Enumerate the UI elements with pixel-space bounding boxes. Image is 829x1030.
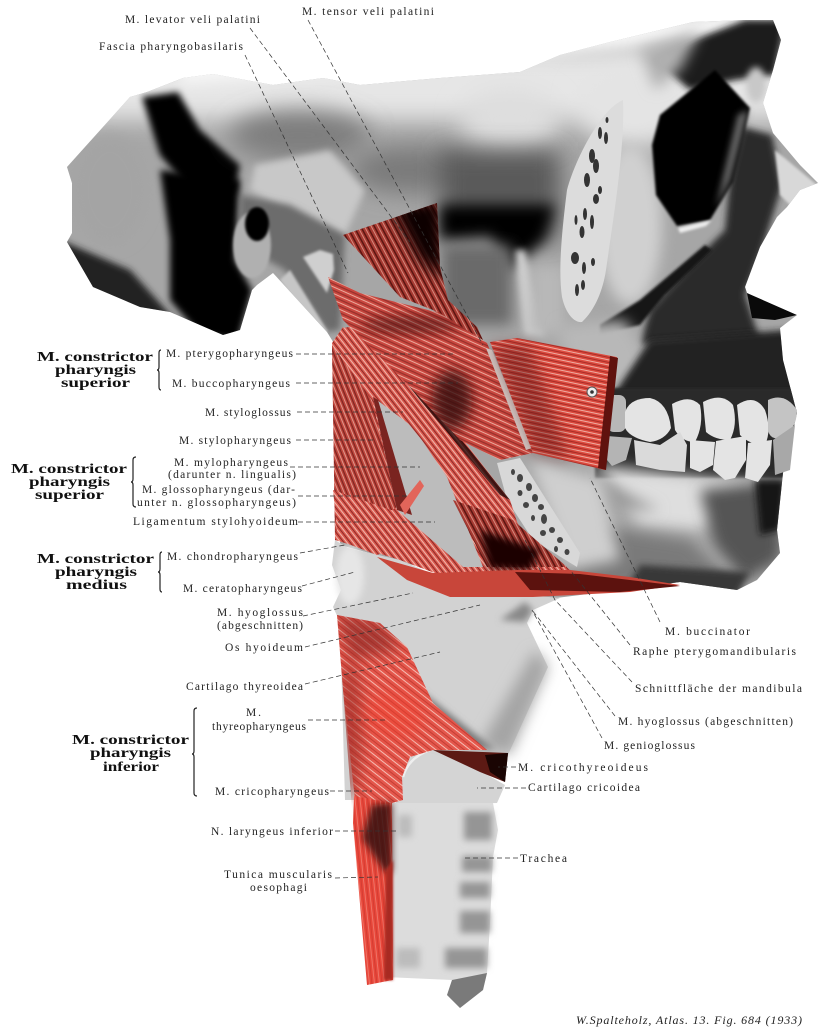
heading: M. constrictor pharyngis superior, second: pharyngis — [29, 475, 111, 490]
labels: upper group: M. buccopharyngeus — [172, 378, 291, 390]
lower teeth — [607, 425, 795, 482]
labels: lower group: M. ceratopharyngeus — [183, 583, 303, 595]
heading: M. constrictor pharyngis inferior: inferior — [103, 760, 159, 775]
labels: middle group: (darunter n. lingualis) — [168, 469, 296, 481]
M. buccinator — [490, 338, 618, 470]
heading: M. constrictor pharyngis superior, first — [37, 350, 153, 391]
top labels — [99, 6, 434, 53]
heading: M. constrictor pharyngis superior, second: superior — [35, 488, 104, 503]
labels: right side: M. genioglossus — [604, 740, 696, 752]
labels: right side: Raphe pterygomandibularis — [633, 646, 797, 658]
heading: M. constrictor pharyngis superior, first: pharyngis — [55, 363, 137, 378]
labels: right side: Cartilago cricoidea — [528, 782, 640, 794]
bracket 4 — [192, 708, 197, 796]
labels: inferior group: M. — [246, 707, 261, 719]
labels: right side: M. hyoglossus (abgeschnitten) — [618, 716, 793, 728]
pharyngeal muscle: pterygo and bucco — [328, 277, 533, 460]
heading: M. constrictor pharyngis medius: medius — [66, 578, 128, 593]
cricoid cartilage — [395, 750, 505, 806]
labels: right side: Schnittfläche der mandibula — [635, 683, 802, 695]
upper teeth — [607, 395, 797, 445]
labels: upper group: M. pterygopharyngeus — [166, 348, 294, 360]
labels: inferior group: N. laryngeus inferior — [211, 826, 333, 838]
muscle: deep lower bundle — [453, 500, 567, 570]
heading: M. constrictor pharyngis medius: M. constrictor — [37, 552, 154, 567]
labels: lower group — [167, 551, 304, 693]
pharyngeal muscle: levator — [343, 200, 483, 340]
heading: M. constrictor pharyngis medius — [37, 552, 154, 593]
labels: inferior group: oesophagi — [250, 882, 307, 894]
muscle: left constrictor group — [332, 327, 570, 590]
bracket 1 — [157, 350, 161, 390]
trachea — [385, 803, 498, 1008]
bracket 2 — [131, 457, 136, 507]
labels: lower group: (abgeschnitten) — [217, 620, 303, 632]
labels: right side: M. buccinator — [665, 626, 750, 638]
cut bone: mandibula — [497, 458, 580, 567]
labels: upper group: M. styloglossus — [205, 407, 292, 419]
gap with ligament — [373, 397, 483, 567]
cut bone: maxilla — [560, 100, 623, 322]
labels: middle group: Ligamentum stylohyoideum — [133, 516, 298, 528]
top labels: Fascia pharyngobasilaris — [99, 41, 244, 53]
muscle: stylopharyngeus bundle — [343, 325, 518, 525]
labels: middle group — [133, 457, 298, 528]
heading: M. constrictor pharyngis inferior: M. constrictor — [72, 733, 189, 748]
labels: right side — [518, 626, 802, 865]
oesophagus muscle — [353, 796, 393, 985]
labels: middle group: M. mylopharyngeus — [174, 457, 289, 469]
labels: upper group — [166, 348, 294, 447]
M. cricothyreoideus — [433, 750, 508, 782]
labels: lower group: M. hyoglossus — [217, 607, 304, 619]
top labels: M. levator veli palatini — [125, 14, 260, 26]
labels: right side: M. cricothyreoideus — [518, 762, 649, 774]
leader lines — [245, 20, 660, 878]
labels: inferior group — [211, 707, 333, 894]
heading: M. constrictor pharyngis medius: pharyngis — [55, 565, 138, 580]
raphe pterygomandibularis — [486, 348, 532, 450]
hyoid and larynx cartilage — [332, 540, 560, 800]
labels: lower group: Os hyoideum — [225, 642, 303, 654]
labels: inferior group: thyreopharyngeus — [212, 721, 307, 733]
heading: M. constrictor pharyngis superior, first: superior — [61, 376, 130, 391]
labels: right side: Trachea — [520, 853, 567, 865]
heading: M. constrictor pharyngis inferior: pharyngis — [90, 746, 172, 761]
labels: inferior group: M. cricopharyngeus — [215, 786, 330, 798]
credit: W.Spalteholz, Atlas. 13. Fig. 684 (1933) — [576, 1013, 802, 1027]
heading: M. constrictor pharyngis superior, second: M. constrictor — [11, 462, 127, 477]
M. thyreopharyngeus and M. cricopharyngeus — [337, 612, 487, 803]
labels: lower group: Cartilago thyreoidea — [186, 681, 303, 693]
skull and mandible — [60, 5, 829, 600]
top labels: M. tensor veli palatini — [302, 6, 434, 18]
labels: middle group: unter n. glossopharyngeus) — [137, 497, 296, 509]
mandibular muscle band — [377, 557, 680, 597]
labels: lower group: M. chondropharyngeus — [167, 551, 299, 563]
bracket 3 — [158, 552, 162, 592]
labels: upper group: M. stylopharyngeus — [179, 435, 292, 447]
labels: middle group: M. glossopharyngeus (dar- — [142, 484, 295, 496]
heading: M. constrictor pharyngis inferior — [72, 733, 189, 775]
labels: inferior group: Tunica muscularis — [224, 869, 333, 881]
heading: M. constrictor pharyngis superior, first: M. constrictor — [37, 350, 153, 365]
heading: M. constrictor pharyngis superior, second — [11, 462, 127, 503]
